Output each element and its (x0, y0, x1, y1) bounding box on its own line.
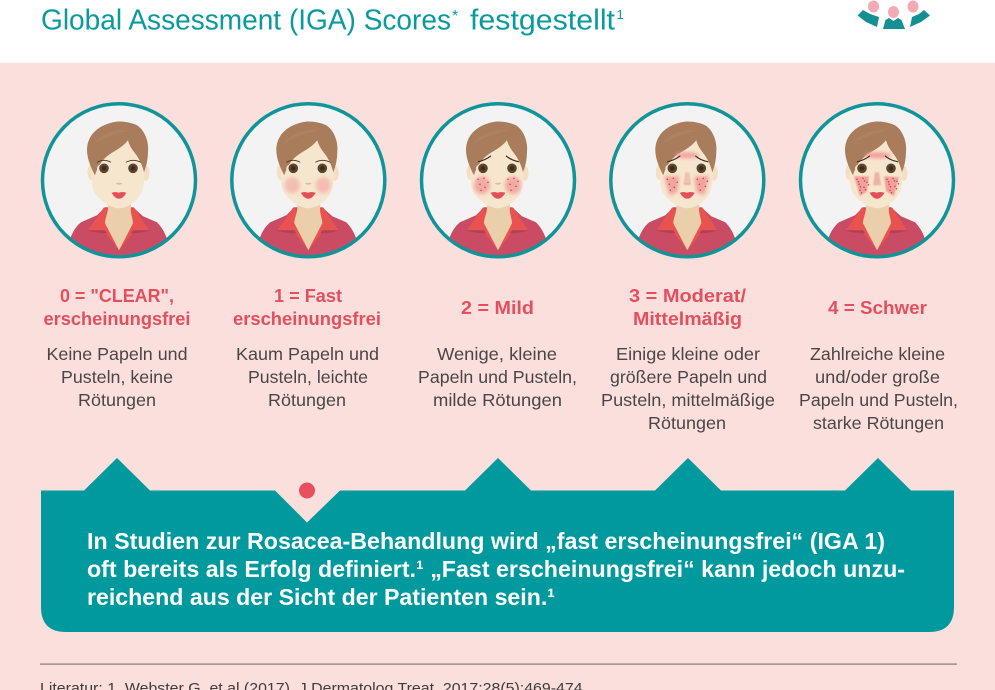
column 1: heading and description: 1 = Fast (274, 285, 342, 306)
column 2: heading and description (418, 297, 577, 410)
top white header band (0, 0, 995, 63)
column 0: heading and description: 0 = "CLEAR", (60, 285, 174, 306)
column 2: heading and description: Wenige, kleine (437, 344, 557, 364)
portrait: IGA 1 almost clear (232, 104, 385, 270)
column 4: heading and description: 4 = Schwer (828, 297, 927, 318)
column 4: heading and description: Papeln und Pusteln, (799, 390, 958, 410)
column 0: heading and description: Rötungen (78, 390, 156, 410)
callout panel with pointers (41, 458, 954, 632)
column 3: heading and description: größere Papeln und (610, 367, 767, 387)
callout text: oft bereits als Erfolg definiert.¹ „Fast erscheinungsfrei“ kann jedoch unzu- (87, 556, 905, 582)
column 3: heading and description: 3 = Moderat/ (629, 285, 746, 306)
callout text (87, 528, 905, 610)
column 3: heading and description (601, 285, 775, 433)
column 4: heading and description (799, 297, 958, 433)
column 1: heading and description: erscheinungsfrei (233, 308, 381, 329)
portrait: IGA 3 moderate (611, 104, 764, 270)
column 0: heading and description: Pusteln, keine (61, 367, 173, 387)
title: * (452, 8, 458, 25)
column 1: heading and description: Rötungen (268, 390, 346, 410)
column 4: heading and description: starke Rötungen (813, 413, 944, 433)
column 3: heading and description: Einige kleine oder (616, 344, 760, 364)
callout text: reichend aus der Sicht der Patienten sein.¹ (87, 584, 555, 610)
portrait: IGA 4 severe (800, 104, 954, 270)
column 1: heading and description (233, 285, 381, 410)
column 2: heading and description: 2 = Mild (461, 297, 534, 318)
portrait: IGA 0 clear (42, 104, 196, 270)
icon: group of three people (858, 0, 930, 29)
callout text: In Studien zur Rosacea-Behandlung wird „fast erscheinungsfrei“ (IGA 1) (87, 528, 885, 554)
title: Global Assessment (IGA) Scores (41, 4, 451, 36)
column 1: heading and description: Kaum Papeln und (236, 344, 379, 364)
column 0: heading and description (44, 285, 190, 410)
title: festgestellt (470, 4, 615, 36)
column 3: heading and description: Pusteln, mittelmäßige (601, 390, 775, 410)
column 4: heading and description: und/oder große (815, 367, 940, 387)
column 2: heading and description: Papeln und Pusteln, (418, 367, 577, 387)
portrait: IGA 2 mild (422, 104, 574, 270)
column 3: heading and description: Rötungen (648, 413, 726, 433)
column 2: heading and description: milde Rötungen (433, 390, 562, 410)
title: 1 (616, 7, 624, 22)
column 0: heading and description: Keine Papeln und (46, 344, 188, 364)
column 3: heading and description: Mittelmäßig (633, 308, 742, 329)
marker dot on selected score (299, 482, 315, 498)
column 4: heading and description: Zahlreiche kleine (810, 344, 945, 364)
column 1: heading and description: Pusteln, leichte (248, 367, 368, 387)
column 0: heading and description: erscheinungsfrei (44, 308, 190, 329)
